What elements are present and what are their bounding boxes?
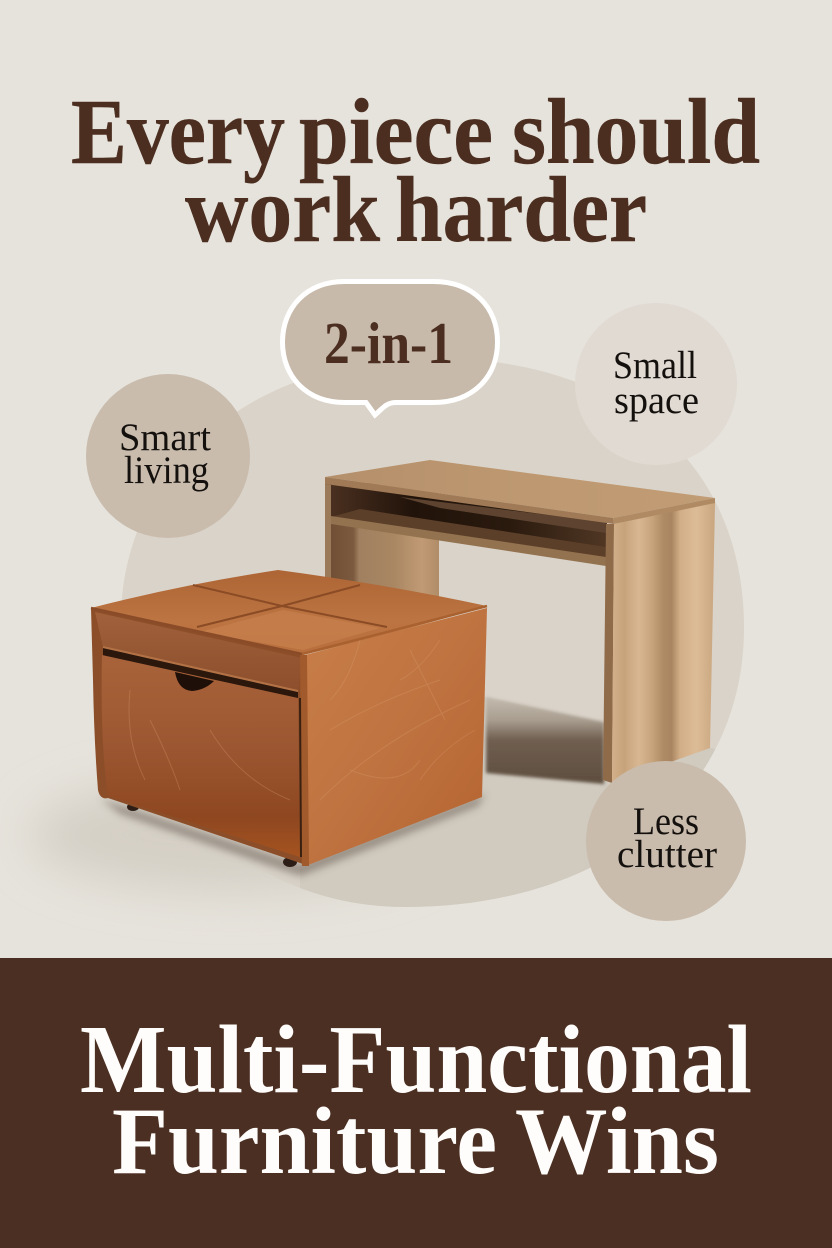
top heading: work [185, 159, 380, 262]
desk back left leg [325, 483, 439, 603]
desk shelf surface [331, 509, 606, 558]
desk shelf front edge [331, 516, 606, 566]
speech bubble: 2-in-1 [282, 282, 498, 415]
bottom banner [0, 958, 832, 1248]
ottoman handle [175, 672, 214, 691]
badge: small space [575, 303, 737, 465]
bottom banner: Furniture [112, 1088, 497, 1194]
badge: less clutter [586, 761, 746, 921]
ottoman lid slit [103, 648, 298, 699]
ottoman top seams [193, 585, 387, 627]
ottoman corner seam [300, 655, 309, 866]
ottoman top piping right [302, 606, 487, 654]
desk top surface [325, 460, 715, 518]
illustration: leather storage ottoman [91, 570, 487, 867]
top heading: should [512, 81, 760, 184]
desk left panel edge [325, 484, 331, 603]
floor inside disc [300, 697, 716, 907]
ottoman ground shadow [100, 794, 485, 876]
desk cavity [330, 482, 607, 558]
desk underside strip [400, 497, 606, 533]
speech bubble: 2-in-1: 2-in-1 [324, 310, 453, 376]
ottoman top highlight [200, 610, 380, 650]
ottoman dark corner line [300, 698, 301, 857]
bottom banner: Wins [515, 1088, 719, 1194]
ottoman top [91, 570, 487, 655]
top heading [71, 81, 760, 262]
badge: small space: space [614, 379, 699, 422]
top heading: harder [395, 159, 647, 262]
desk right leg side [612, 503, 715, 783]
illustration: wooden desk [325, 460, 715, 783]
badge: less clutter: Less [633, 800, 699, 843]
floor tint with soft edge [30, 777, 440, 893]
badge: smart living: Smart [119, 416, 211, 459]
ottoman feet [127, 803, 139, 811]
badge: small space: Small [613, 344, 697, 387]
bottom banner: Multi-Functional [80, 1006, 752, 1114]
top heading: Every [71, 81, 285, 184]
badge: less clutter: clutter [617, 833, 717, 876]
ottoman silhouette base [91, 608, 309, 866]
badge: smart living: living [124, 449, 209, 492]
desk top front edge [325, 477, 614, 524]
large background disc [121, 358, 744, 907]
ottoman lid band [95, 612, 302, 693]
ottoman drawer front [102, 655, 300, 857]
ottoman lid lip [103, 647, 298, 691]
ottoman top piping left [91, 608, 302, 654]
background [0, 0, 832, 958]
desk floor shadow [486, 697, 604, 784]
top heading: piece [299, 81, 493, 184]
desk top side edge [613, 498, 715, 524]
ottoman leather creases [129, 640, 475, 800]
desk right leg front edge [603, 524, 614, 783]
badge: smart living [86, 374, 250, 538]
ottoman right side [305, 608, 487, 865]
